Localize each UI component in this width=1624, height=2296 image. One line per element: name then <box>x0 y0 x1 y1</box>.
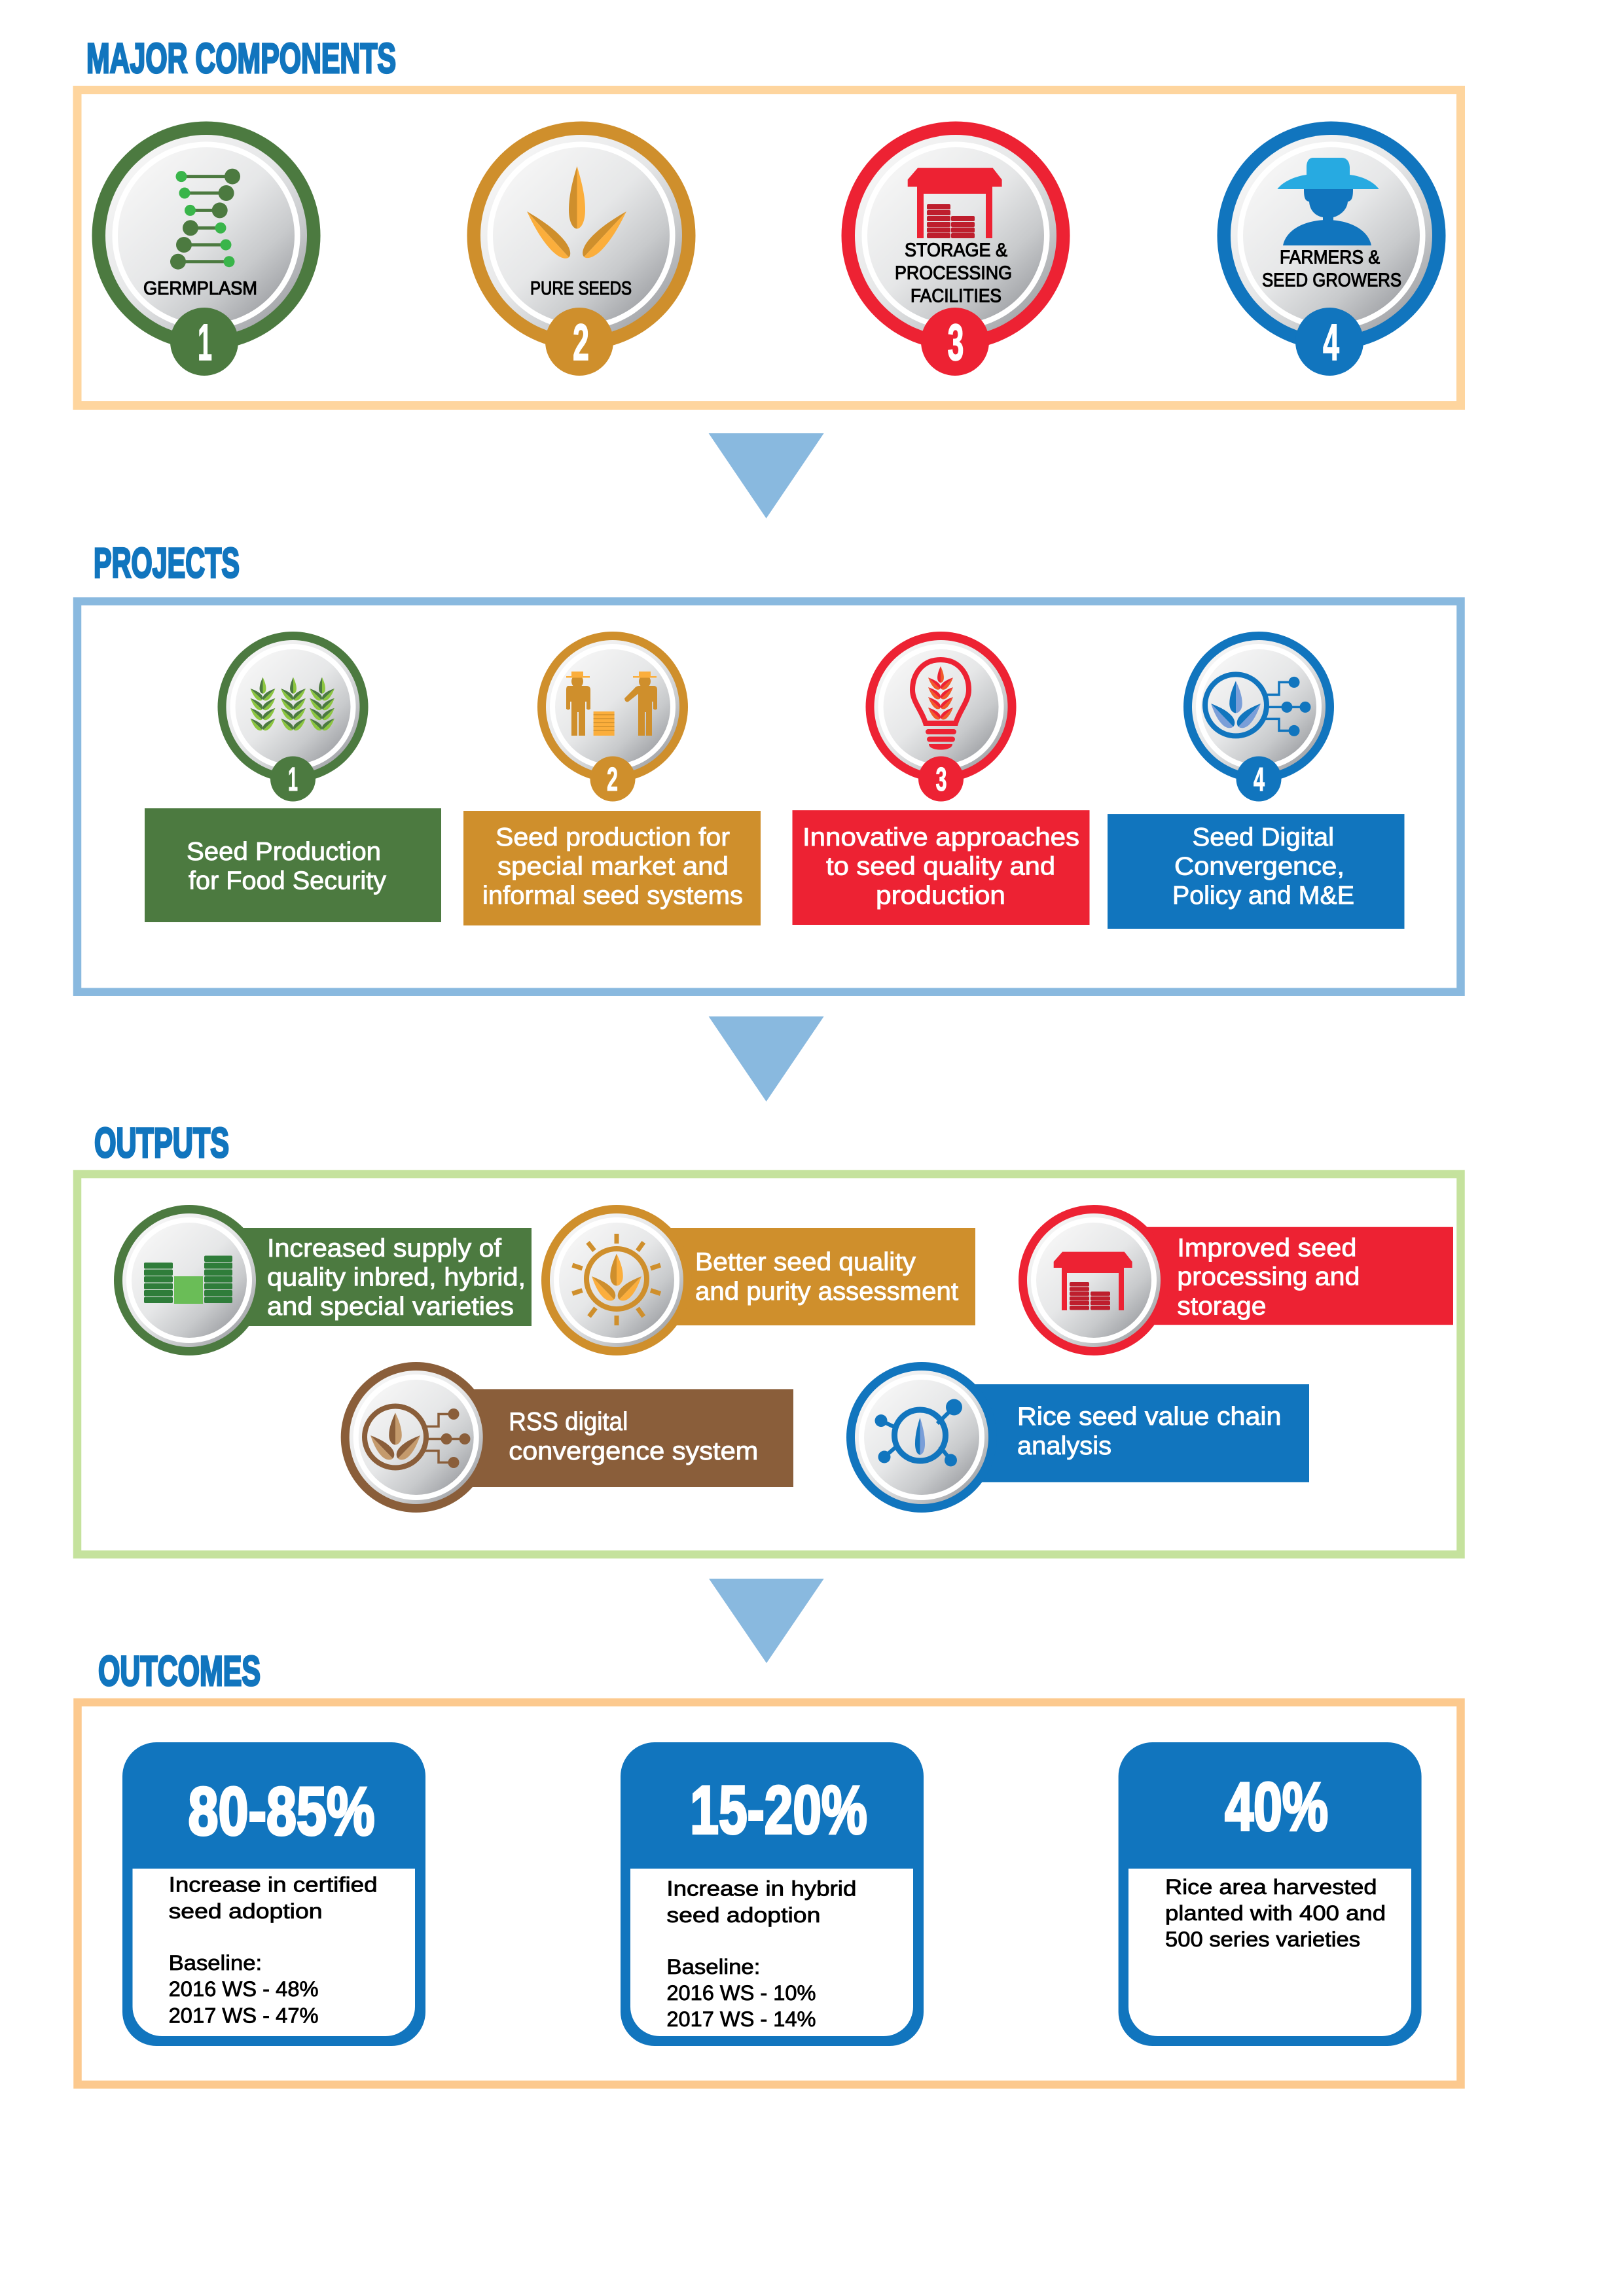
arrow: projects to outputs <box>709 1016 824 1102</box>
text <box>509 1408 758 1465</box>
stat: 40%: 40% <box>1225 1769 1328 1845</box>
badge: 3: 3 <box>936 761 947 798</box>
text <box>666 1877 856 2031</box>
text: Baseline: <box>169 1951 262 1975</box>
icon: dna <box>170 169 240 270</box>
text: processing and <box>1177 1263 1360 1291</box>
text <box>267 1234 526 1321</box>
label box: Seed Digital <box>1193 823 1334 852</box>
text: and purity assessment <box>695 1278 958 1306</box>
text <box>169 1873 378 2028</box>
arrow: outputs to outcomes <box>709 1579 824 1663</box>
icon: farmer <box>1277 158 1379 245</box>
label box: Innovative approaches <box>803 823 1079 852</box>
text: 2017 WS - 14% <box>666 2007 816 2031</box>
stat: 80-85%: 80-85% <box>189 1774 374 1850</box>
panel: outputs <box>77 1174 1461 1554</box>
label box: Convergence, <box>1174 853 1344 881</box>
badge: 1 <box>270 757 316 801</box>
text: Rice area harvested <box>1165 1875 1377 1899</box>
label box <box>463 811 761 925</box>
arrow: components to projects <box>709 433 824 518</box>
output: increased supply <box>114 1205 532 1355</box>
component 3: storage and processing facilities <box>842 122 1070 376</box>
label box: special market and <box>497 853 729 881</box>
text <box>1177 1234 1360 1321</box>
label box: Policy and M&E <box>1172 882 1354 910</box>
label box: production <box>876 882 1005 910</box>
card: 400 and 500 series varieties <box>1119 1742 1422 2046</box>
text: Rice seed value chain <box>1017 1403 1282 1431</box>
card: certified seed adoption <box>122 1742 425 2046</box>
badge: 4: 4 <box>1254 761 1265 798</box>
text: Baseline: <box>666 1955 760 1979</box>
label: storage and processing facilities: STORAGE & <box>905 240 1007 260</box>
component 4: farmers and seed growers <box>1218 122 1445 376</box>
component 1: germplasm <box>92 122 321 376</box>
text: 2017 WS - 47% <box>169 2004 319 2028</box>
icon: sun with seed <box>572 1234 660 1325</box>
label box: Seed production for <box>496 823 730 852</box>
heading: outputs: OUTPUTS <box>94 1119 229 1166</box>
badge: 2: 2 <box>573 313 589 371</box>
label: farmers and seed growers: SEED GROWERS <box>1262 270 1401 291</box>
icon: storage shed <box>1054 1252 1132 1310</box>
text: and special varieties <box>267 1293 514 1321</box>
heading: outcomes: OUTCOMES <box>98 1647 261 1695</box>
stat: 15-20%: 15-20% <box>690 1772 867 1848</box>
text: Increase in hybrid <box>666 1877 856 1901</box>
panel: outcomes <box>77 1702 1461 2085</box>
badge: 1: 1 <box>198 313 212 371</box>
label box: Seed Production <box>187 838 381 866</box>
badge: 3: 3 <box>948 313 964 371</box>
badge: 2: 2 <box>607 761 618 798</box>
badge: 2 <box>545 308 613 376</box>
text: storage <box>1177 1293 1266 1321</box>
icon: digital seed circuit <box>1205 674 1310 736</box>
panel: projects <box>77 601 1461 992</box>
output: rss digital convergence system <box>341 1362 793 1513</box>
label box <box>145 808 441 922</box>
label box <box>1108 814 1405 929</box>
label: storage and processing facilities <box>895 240 1012 306</box>
project 4: seed digital convergence <box>1108 632 1405 929</box>
label: farmers and seed growers: FARMERS & <box>1280 247 1380 268</box>
text: seed adoption <box>666 1903 820 1927</box>
text: Better seed quality <box>695 1248 916 1276</box>
label box: to seed quality and <box>826 853 1055 881</box>
label: germplasm: GERMPLASM <box>143 278 257 299</box>
icon: seeds <box>521 166 632 263</box>
output: better seed quality <box>541 1205 975 1355</box>
icon: light bulb with rice <box>912 660 969 750</box>
card: hybrid seed adoption <box>621 1742 924 2046</box>
text: seed adoption <box>169 1899 323 1923</box>
text <box>1165 1875 1386 1951</box>
icon: rice stalks <box>248 677 336 732</box>
icon: stacked bars <box>144 1255 232 1304</box>
badge: 4 <box>1236 757 1282 801</box>
text: Increased supply of <box>267 1234 501 1263</box>
badge: 3 <box>918 757 964 801</box>
badge: 2 <box>590 757 635 801</box>
text: convergence system <box>509 1437 758 1465</box>
text: planted with 400 and <box>1165 1901 1386 1925</box>
output: improved processing and storage <box>1019 1205 1453 1355</box>
label box <box>792 810 1089 925</box>
heading: projects: PROJECTS <box>94 539 240 586</box>
text <box>1017 1403 1282 1460</box>
project 1: seed production for food security <box>145 632 441 922</box>
label box: for Food Security <box>189 867 386 895</box>
text <box>695 1248 958 1306</box>
icon: digital seed circuit <box>365 1406 470 1468</box>
component 2: pure seeds <box>467 122 695 376</box>
text: analysis <box>1017 1432 1111 1460</box>
label: storage and processing facilities: FACILITIES <box>911 285 1001 306</box>
panel: major components <box>77 90 1461 406</box>
text: 500 series varieties <box>1165 1928 1360 1951</box>
text: Improved seed <box>1177 1234 1356 1263</box>
project 2: seed production for special market <box>463 632 761 925</box>
badge: 1: 1 <box>288 761 298 798</box>
text: 2016 WS - 10% <box>666 1981 816 2005</box>
text: 2016 WS - 48% <box>169 1977 319 2001</box>
label box: informal seed systems <box>482 882 743 910</box>
output: rice seed value chain analysis <box>846 1362 1309 1513</box>
label: storage and processing facilities: PROCESSING <box>895 263 1012 284</box>
label: farmers and seed growers <box>1262 247 1401 291</box>
badge: 3 <box>921 308 989 376</box>
text: Increase in certified <box>169 1873 378 1897</box>
badge: 1 <box>170 308 238 376</box>
text: quality inbred, hybrid, <box>267 1263 526 1292</box>
icon: storage shed <box>908 168 1002 238</box>
label: pure seeds: PURE SEEDS <box>530 278 632 299</box>
project 3: innovative approaches <box>792 632 1089 925</box>
icon: farmers with seed stack <box>566 672 657 736</box>
icon: value chain network <box>875 1399 962 1466</box>
text: RSS digital <box>509 1408 628 1436</box>
heading: major components: MAJOR COMPONENTS <box>86 35 396 82</box>
badge: 4: 4 <box>1323 313 1339 371</box>
badge: 4 <box>1295 308 1363 376</box>
